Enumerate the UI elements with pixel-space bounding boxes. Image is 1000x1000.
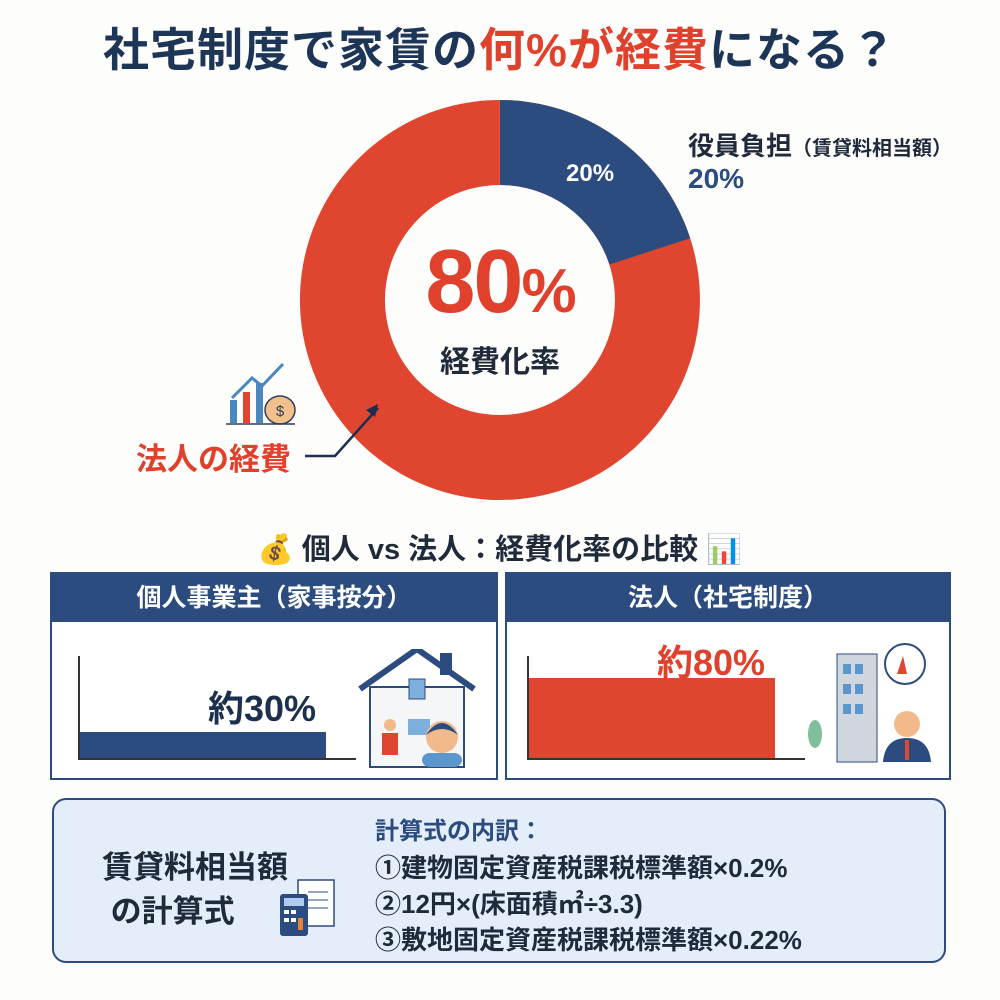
donut center label: 80% [425, 232, 575, 332]
formula details [375, 818, 802, 955]
formula title: の計算式 [111, 894, 235, 929]
callout: officer burden [688, 131, 952, 194]
bar: 30% [78, 732, 326, 759]
formula details: ②12円×(床面積㎡÷3.3) [375, 889, 643, 919]
panel header [507, 574, 949, 622]
text: 経費化率 [440, 346, 560, 379]
icon: house with worker [358, 649, 476, 768]
bar: 80% [527, 678, 775, 760]
comparison heading: 💰 個人 vs 法人：経費化率の比較 📊 [258, 534, 742, 566]
panel header [52, 574, 496, 622]
panel: corporation [505, 572, 951, 780]
segment label inside blue: 20% [566, 160, 614, 187]
donut chart [226, 100, 700, 500]
panel: individual [50, 572, 498, 780]
formula details: ①建物固定資産税課税標準額×0.2% [375, 853, 787, 883]
icon: growth chart and money bag [226, 364, 295, 424]
panel header: 法人（社宅制度） [628, 584, 828, 612]
panel header: 個人事業主（家事按分） [136, 584, 412, 612]
formula title: 賃貸料相当額 [102, 850, 288, 885]
icon: office building and businessman [808, 643, 931, 762]
icon: calculator and document [280, 879, 335, 936]
formula title [102, 850, 288, 929]
formula details: 計算式の内訳： [375, 818, 543, 845]
callout: corporate expense: 法人の経費 [136, 442, 291, 477]
panel: individual: 約30% [208, 688, 316, 729]
formula details: ③敷地固定資産税課税標準額×0.22% [375, 925, 802, 955]
icon: growth chart and money bag: $ [276, 403, 285, 420]
panel: corporation: 約80% [657, 642, 765, 683]
title: 社宅制度で家賃の何%が経費になる？ [103, 24, 897, 76]
panel: formula [52, 798, 946, 963]
callout: officer burden: 役員負担（賃貸料相当額） [688, 131, 952, 161]
callout: officer burden: 20% [688, 163, 744, 194]
